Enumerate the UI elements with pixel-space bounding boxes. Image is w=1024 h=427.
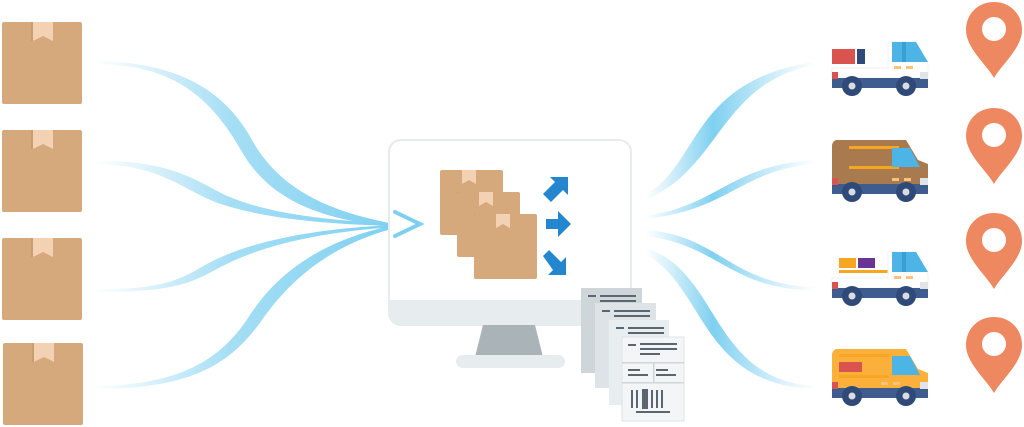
outgoing flow curves: [645, 62, 815, 389]
inbound arrow head: [395, 212, 420, 236]
incoming flow curves: [95, 61, 395, 389]
sorting arrows: [543, 177, 571, 275]
stacked boxes: [440, 170, 537, 279]
truck 3 flatbed: [832, 252, 928, 306]
box 1: [2, 22, 82, 104]
pin 2: [966, 108, 1022, 184]
left source boxes: [2, 22, 83, 425]
monitor: [389, 140, 631, 368]
location pins: [966, 2, 1022, 393]
truck 4 yellow van: [832, 349, 928, 406]
pin 4: [966, 317, 1022, 393]
box 4: [3, 343, 83, 425]
shipping labels: [581, 288, 684, 421]
truck 2 brown van: [832, 140, 928, 202]
pin 3: [966, 213, 1022, 289]
pin 1: [966, 2, 1022, 78]
box 3: [2, 238, 82, 320]
truck 1 flatbed: [832, 42, 928, 96]
stand: [475, 325, 543, 357]
box 2: [2, 130, 82, 212]
